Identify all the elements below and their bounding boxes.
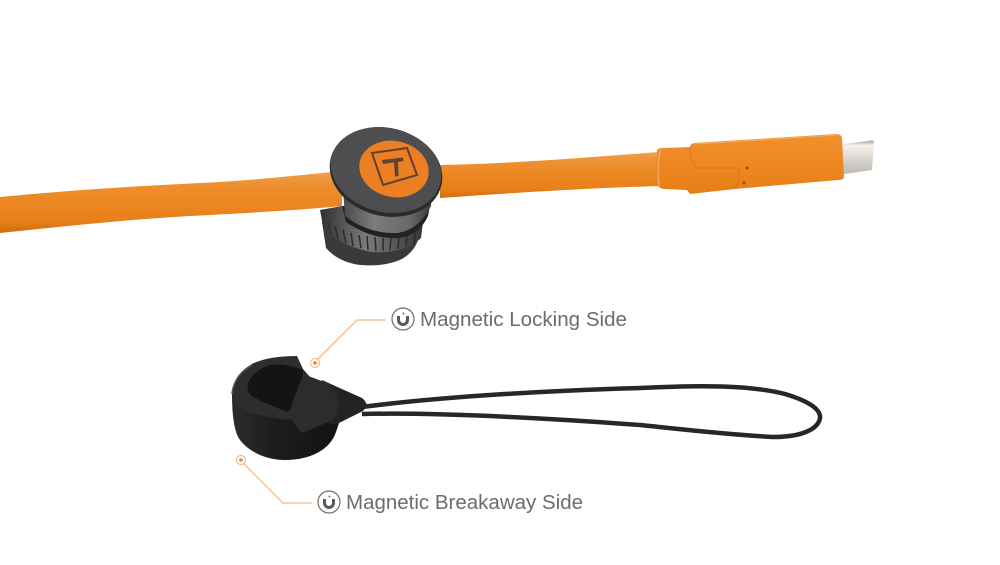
- clip body: [232, 385, 340, 460]
- cable right segment: [440, 152, 660, 198]
- metal plug: [838, 140, 874, 175]
- clip top rim: [232, 356, 330, 420]
- clip flap: [288, 374, 338, 433]
- icon: magnet breakaway: [318, 491, 340, 513]
- connector holes: [746, 166, 748, 170]
- label: Magnetic Breakaway Side: Magnetic Breakaway Side: [346, 492, 583, 514]
- clip tab: [315, 380, 366, 425]
- knurled ring: [320, 206, 423, 252]
- cable left segment: [0, 171, 342, 233]
- leader line: breakaway side: [236, 456, 312, 503]
- T logo: [372, 148, 417, 185]
- knob body: [343, 190, 432, 233]
- cable knob: [320, 116, 452, 265]
- cord loop: [362, 386, 820, 437]
- knob base ring: [322, 222, 420, 265]
- knob dark band: [342, 206, 430, 238]
- magnetic clip: [232, 356, 366, 460]
- orange button: [354, 134, 434, 204]
- icon: magnet locking: [392, 308, 414, 330]
- cap outer: [320, 116, 452, 228]
- leader line: locking side: [310, 320, 386, 368]
- label: Magnetic Locking Side: Magnetic Locking Side: [420, 309, 627, 331]
- clip recess: [248, 365, 303, 412]
- connector housing: [656, 134, 844, 194]
- USB-C connector: [656, 134, 874, 194]
